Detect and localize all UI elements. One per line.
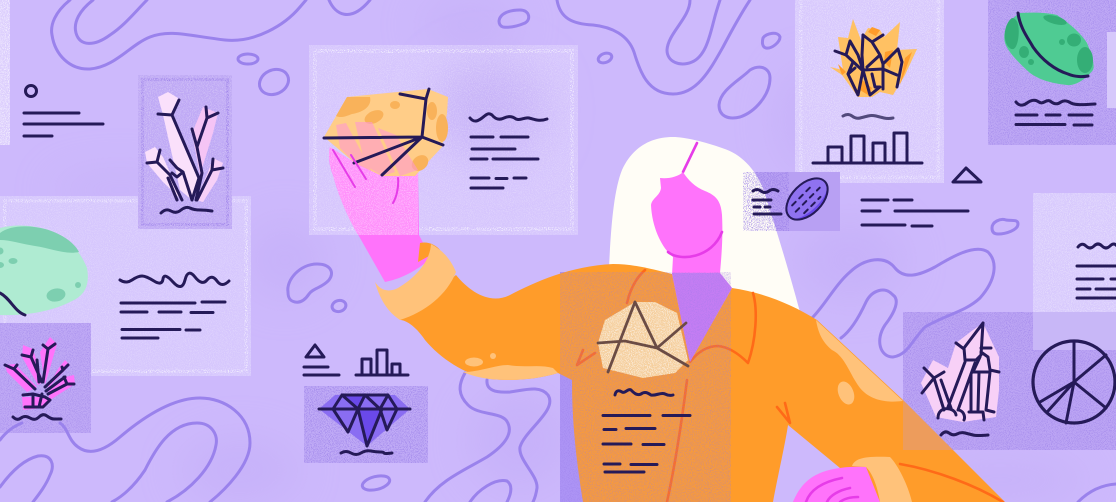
icon group: triangle and bars (304, 345, 408, 375)
left hand lighter part under card (329, 147, 418, 235)
oval: small right (762, 33, 780, 48)
rock stipple (598, 302, 688, 378)
icon: triangle (953, 168, 981, 182)
stone body (0, 225, 88, 315)
heading squiggle (615, 390, 673, 395)
trail: lower left inner (112, 423, 216, 502)
text block: centre right (862, 200, 968, 226)
panel: lower right card dark (903, 312, 1116, 450)
panel: top-left light strip (0, 0, 10, 145)
chest rock lines (598, 302, 688, 372)
fingers seen through rock (336, 122, 418, 176)
trail: lower left outer (0, 398, 250, 502)
crystal body (921, 323, 999, 422)
diamond facets (342, 395, 382, 446)
heading squiggle (1078, 244, 1116, 248)
chest rock body (598, 302, 688, 378)
text lines (304, 367, 339, 375)
text lines (121, 302, 225, 338)
trail: top centre inner (667, 0, 720, 64)
icon: ring (26, 86, 36, 96)
finger lines (333, 150, 398, 203)
trail: centre lower C (470, 481, 511, 502)
bar chart (356, 350, 408, 375)
crystal lines (835, 35, 902, 95)
text lines (603, 416, 690, 472)
hair (609, 137, 800, 320)
rock held in hand (324, 89, 448, 203)
stone dark patch (0, 226, 79, 253)
crystal lines (922, 323, 999, 420)
bar chart (813, 133, 922, 163)
face and neck (651, 172, 732, 362)
crystal: pale cluster in card (145, 92, 223, 213)
bottom hand (793, 467, 880, 502)
panel: chest card behind figure (560, 272, 731, 502)
right shoulder highlight (816, 320, 903, 402)
oval: centre left small (331, 299, 347, 313)
stone line (0, 293, 25, 315)
hand grain (329, 147, 418, 235)
panel: diamond card (304, 386, 428, 463)
lower right card corner tint (903, 400, 953, 450)
trail: centre lower B (487, 380, 550, 502)
highlight dots (465, 353, 496, 366)
trail: right (812, 249, 994, 357)
panel: top right light panel (795, 0, 944, 183)
small stone (779, 171, 835, 227)
trail: centre lower A (425, 373, 509, 502)
sleeve highlight oval (835, 379, 857, 407)
panel: left light panel (0, 196, 251, 376)
diamond body (319, 395, 410, 446)
trail: lower left bottom (0, 456, 52, 502)
chest rock and text (598, 302, 690, 472)
heading squiggle (470, 114, 547, 121)
crystal lines (147, 100, 223, 200)
trail: bottom right (1078, 484, 1116, 502)
oval: bottom centre (361, 473, 391, 493)
jaw line (668, 232, 722, 257)
chest card grain (560, 272, 731, 502)
shirt details (577, 270, 1003, 502)
left hand (329, 147, 431, 282)
crystal: orange cluster (813, 19, 922, 163)
chest card tint (560, 272, 731, 502)
panel: centre light panel (309, 45, 578, 235)
oval: top left small (238, 54, 258, 64)
figure: woman (329, 137, 1005, 502)
crystal: pale cluster lower right (921, 323, 999, 436)
text lines (1077, 266, 1116, 298)
diamond card content (319, 395, 410, 454)
stone body (1004, 13, 1094, 85)
text lines (753, 190, 781, 214)
caption squiggle (941, 432, 988, 436)
small card speckle over hair (743, 172, 789, 231)
chart: pie (1033, 341, 1115, 423)
panel: right edge light panel (1033, 193, 1116, 350)
text block: rock description (470, 114, 547, 188)
crystal lines (5, 344, 74, 407)
neck V over card (672, 273, 732, 362)
oval: tiny (597, 51, 613, 65)
trail: top centre outer (557, 0, 750, 94)
caption squiggle (161, 207, 212, 213)
panel: small stone card (743, 172, 840, 231)
stone: green in card (1004, 13, 1095, 125)
crystal petals (5, 337, 75, 410)
trail: top left inner (75, 0, 147, 43)
trail: top left end loop (329, 0, 370, 14)
panel: green stone card dark (988, 0, 1116, 145)
strand line (683, 143, 697, 172)
blob: top centre large (719, 67, 770, 118)
text block: right edge (1077, 244, 1116, 298)
heading squiggle (1016, 100, 1095, 105)
cuff shadow (418, 242, 440, 262)
stone spots (0, 248, 81, 303)
text lines (24, 113, 103, 136)
crystal bodies (145, 92, 223, 202)
heading squiggle (120, 273, 229, 287)
text block: left panel (120, 273, 229, 338)
text lines (1016, 115, 1092, 125)
panel: crystal card dark (138, 75, 232, 229)
oval: top left large (255, 65, 293, 99)
left arm highlight (463, 365, 558, 380)
trail: top left outer (52, 0, 306, 69)
rock lines (324, 89, 443, 175)
text lines (471, 137, 538, 188)
rock body (324, 89, 448, 176)
stone spots (1005, 13, 1093, 73)
panel: pink crystal card dark (0, 323, 91, 433)
text block: top left (24, 86, 103, 136)
diamond lines (319, 395, 410, 446)
small stone card content (753, 171, 835, 227)
caption squiggle (13, 415, 61, 419)
oval: top centre (499, 10, 529, 27)
shirt body and sleeves (400, 264, 1005, 502)
rock spots (336, 97, 448, 174)
stone: pale green (0, 225, 88, 315)
crystal body (830, 19, 917, 97)
crystal darker facets (838, 27, 912, 95)
bottom cuff (852, 457, 912, 502)
oval: right middle (992, 219, 1018, 234)
crystal: magenta cluster (5, 337, 75, 419)
bean: centre left (288, 264, 332, 302)
right arm underside cut (773, 425, 840, 502)
caption squiggle (843, 114, 893, 118)
icon: small triangle (306, 345, 324, 357)
left cuff (375, 244, 456, 320)
caption squiggle (341, 451, 392, 454)
stone line (1018, 13, 1088, 77)
